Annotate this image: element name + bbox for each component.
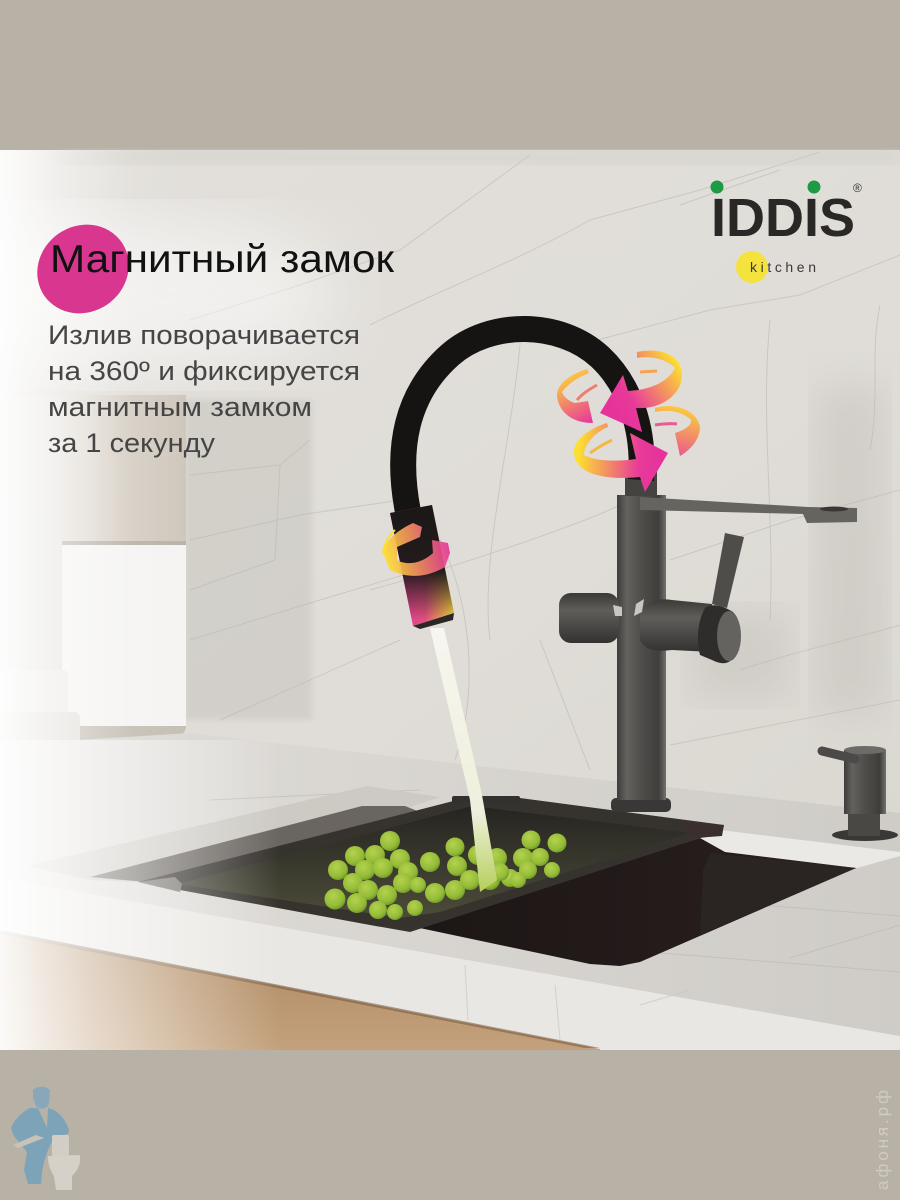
description text: Излив поворачивается bbox=[48, 320, 360, 350]
toilet bowl bbox=[48, 1155, 80, 1190]
counter front edge bbox=[0, 878, 900, 1050]
colander bbox=[138, 796, 724, 932]
arrow: right small bbox=[655, 406, 700, 456]
cabinet shadow line bbox=[0, 930, 600, 1048]
logo: IDDIS: ® bbox=[853, 181, 862, 195]
right valve body bbox=[640, 599, 712, 652]
panel: kitchen photo bbox=[0, 150, 900, 1050]
faucet column bbox=[617, 495, 666, 800]
pink circle behind title bbox=[20, 207, 146, 331]
canister bbox=[60, 395, 186, 740]
top wall shading bbox=[60, 150, 900, 164]
plumber wrench bbox=[13, 1135, 44, 1148]
title: Магнитный замок bbox=[50, 238, 395, 281]
flexible spout hose bbox=[403, 329, 642, 512]
arrow: left small bbox=[557, 369, 593, 423]
lower left white fade bbox=[0, 740, 280, 1050]
plumber body bbox=[11, 1108, 69, 1184]
grapes bbox=[324, 830, 566, 920]
bottom band bbox=[0, 1050, 900, 1200]
plumber head bbox=[33, 1087, 50, 1109]
faucet base bbox=[611, 798, 671, 812]
valve highlights bbox=[613, 599, 644, 616]
inner ribbon strokes bbox=[577, 371, 677, 453]
arrow: lower curved bbox=[574, 423, 668, 492]
rotation arrows around spout bbox=[557, 351, 700, 492]
glass jar bbox=[0, 395, 80, 754]
valve disc bbox=[698, 605, 740, 663]
soap dispenser bbox=[822, 746, 898, 841]
wood cabinet bbox=[0, 932, 600, 1050]
logo: IDDIS: IDDIS bbox=[711, 188, 855, 248]
description text: за 1 секунду bbox=[48, 428, 216, 458]
counter edge veins bbox=[465, 965, 690, 1040]
water stream bbox=[430, 628, 497, 892]
icon: plumber with toilet bbox=[11, 1087, 80, 1190]
aerator gradient bbox=[390, 505, 454, 626]
wall shadow beside canister bbox=[185, 400, 312, 720]
description text: магнитным замком bbox=[48, 392, 312, 422]
faucet bbox=[390, 329, 857, 812]
text glow bbox=[0, 215, 340, 375]
logo: kitchen: kitchen bbox=[750, 259, 816, 275]
logo: kitchen bbox=[736, 251, 816, 283]
sink basin bbox=[27, 786, 900, 966]
top band bbox=[0, 0, 900, 150]
wall shadow right bbox=[815, 385, 885, 715]
far wall bbox=[90, 806, 420, 884]
swing arm bbox=[640, 497, 857, 523]
swing arm ring bbox=[820, 506, 848, 512]
left white fade bbox=[0, 150, 190, 740]
watermark: afonya.rf: афоня.рф bbox=[873, 1090, 892, 1190]
marble wall bbox=[0, 150, 900, 830]
arrow: upper curved bbox=[600, 351, 682, 432]
arrow on aerator bbox=[383, 523, 450, 576]
faucet collar bbox=[625, 472, 657, 496]
description text bbox=[48, 320, 360, 458]
toilet tank bbox=[52, 1135, 69, 1156]
description text: на 360º и фиксируется bbox=[48, 356, 360, 386]
lever handle bbox=[712, 533, 744, 608]
rim back bbox=[27, 786, 440, 884]
aerator tip bbox=[413, 613, 454, 629]
left handle stub bbox=[559, 593, 619, 643]
wall shadow behind faucet bbox=[690, 610, 790, 700]
counter veins bbox=[210, 790, 900, 972]
countertop surface bbox=[0, 733, 900, 1036]
